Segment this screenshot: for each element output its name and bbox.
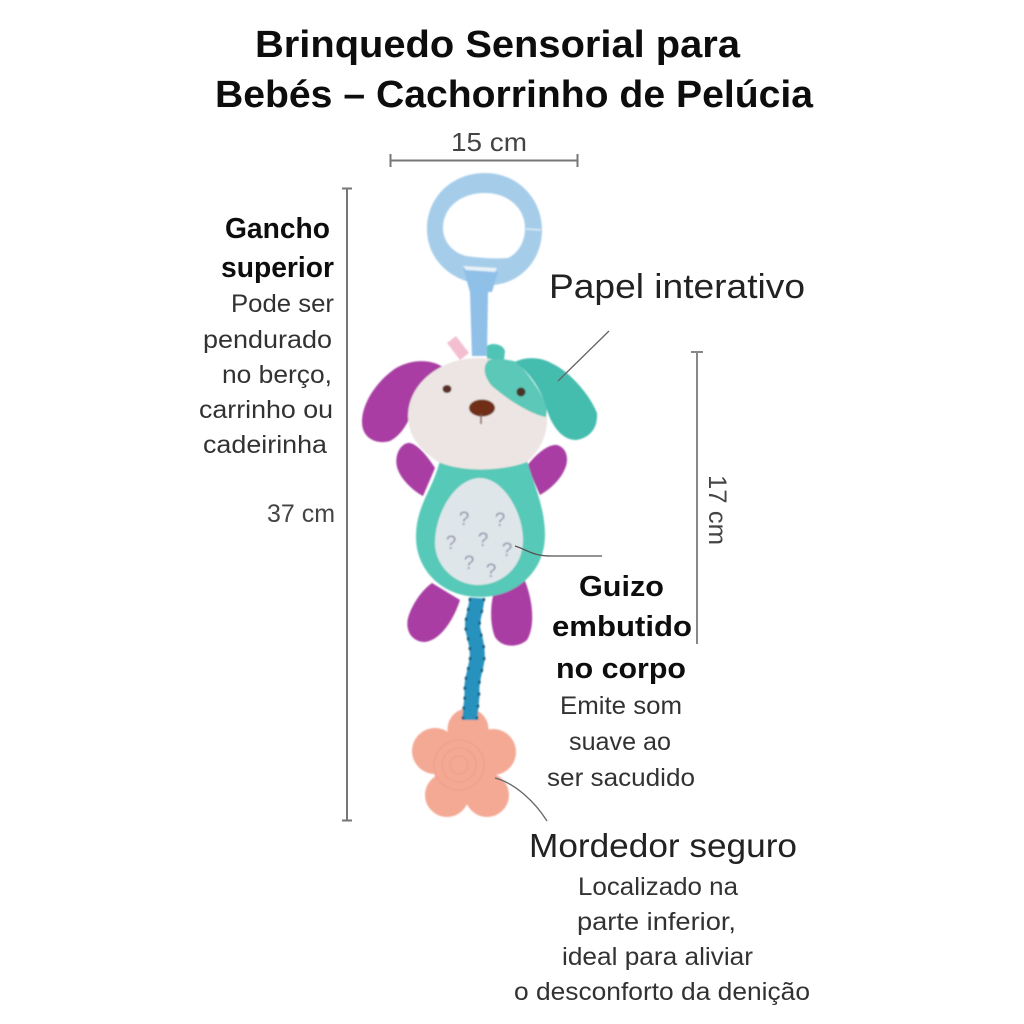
toy belly <box>435 478 523 585</box>
toy pink tag <box>447 336 469 360</box>
toy elastic cord <box>463 598 484 720</box>
toy arms <box>396 443 567 496</box>
text block: gancho superior: cadeirinha <box>203 431 327 459</box>
title: Brinquedo Sensorial para <box>255 24 741 66</box>
width dimension: 15 cm: 15 cm <box>451 127 527 157</box>
text block: guizo embutido: embutido <box>552 611 692 643</box>
height dimension: 37 cm: 37 cm <box>267 500 335 528</box>
text block: mordedor seguro: Localizado na <box>578 873 738 901</box>
text block: mordedor seguro: Mordedor seguro <box>529 827 797 864</box>
text block: gancho superior: Pode ser <box>231 290 334 318</box>
body height dimension: 17 cm <box>691 352 731 644</box>
toy strap <box>463 266 498 356</box>
text block: guizo embutido: suave ao <box>569 728 671 756</box>
toy question marks: ? <box>486 561 496 582</box>
toy teal tag <box>487 344 505 360</box>
text block: gancho superior <box>199 213 334 459</box>
toy question marks: ? <box>478 530 488 551</box>
toy ring hook <box>427 173 542 285</box>
toy body <box>416 460 545 597</box>
text block: gancho superior: superior <box>221 252 334 284</box>
callout leader: guizo <box>515 546 602 556</box>
text block: guizo embutido <box>547 571 695 792</box>
text block: mordedor seguro: ideal para aliviar <box>562 943 753 971</box>
callout: papel interativo: Papel interativo <box>549 268 805 306</box>
toy flower teether <box>412 708 516 817</box>
toy question marks <box>446 509 512 582</box>
toy question marks: ? <box>464 553 474 574</box>
toy question marks: ? <box>502 540 512 561</box>
text block: guizo embutido: Emite som <box>560 692 682 720</box>
text block: guizo embutido: ser sacudido <box>547 764 695 792</box>
text block: mordedor seguro: parte inferior, <box>577 908 736 936</box>
toy eye patch <box>485 359 547 417</box>
text block: guizo embutido: no corpo <box>556 653 686 685</box>
text block: gancho superior: pendurado <box>203 326 332 354</box>
width dimension: 15 cm <box>390 127 578 167</box>
title: Bebés – Cachorrinho de Pelúcia <box>215 74 814 116</box>
callout: papel interativo <box>549 268 805 381</box>
toy: plush puppy <box>362 173 597 817</box>
toy right ear <box>515 358 597 440</box>
text block: guizo embutido: Guizo <box>579 571 664 603</box>
toy question marks: ? <box>459 509 469 530</box>
body height dimension: 17 cm: 17 cm <box>703 475 731 545</box>
text block: gancho superior: no berço, <box>222 361 332 389</box>
text block: mordedor seguro <box>514 827 810 1006</box>
toy left ear <box>362 361 443 442</box>
toy question marks: ? <box>446 533 456 554</box>
toy head <box>408 358 547 470</box>
height dimension: 37 cm <box>267 188 352 821</box>
text block: gancho superior: Gancho <box>225 213 330 245</box>
text block: mordedor seguro: o desconforto da denição <box>514 978 810 1006</box>
toy face <box>442 385 526 424</box>
title <box>215 24 814 116</box>
toy legs <box>407 581 532 646</box>
callout leader: mordedor <box>495 778 547 821</box>
text block: gancho superior: carrinho ou <box>199 396 333 424</box>
toy question marks: ? <box>495 510 505 531</box>
